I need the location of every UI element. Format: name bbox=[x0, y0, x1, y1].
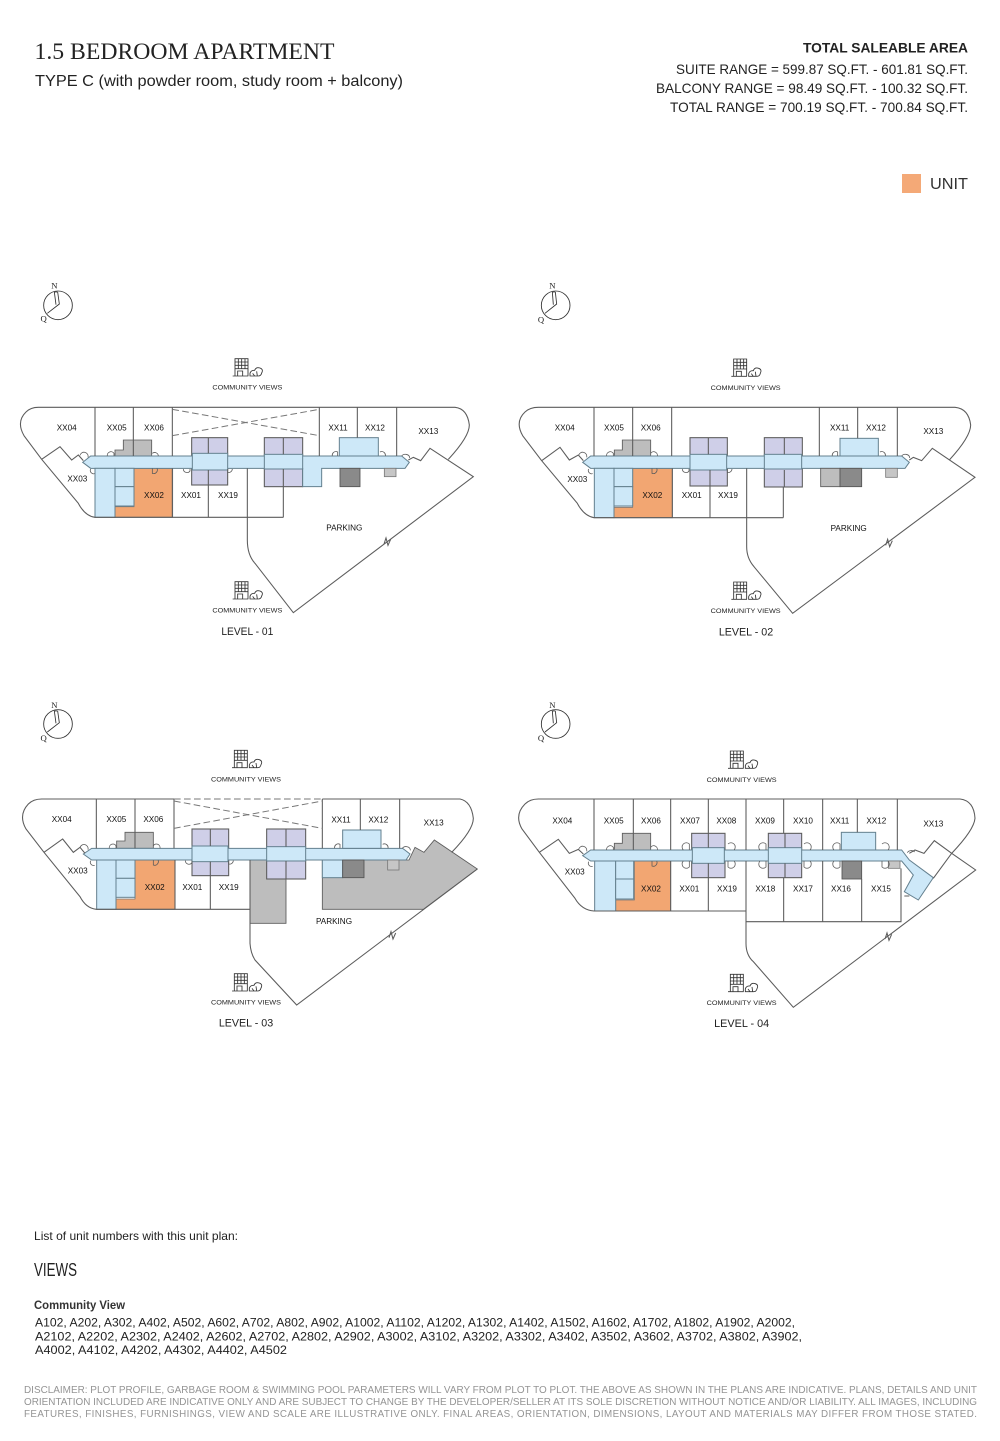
panel: level 01 floor plan bbox=[20, 281, 473, 638]
icon: compass bbox=[538, 281, 570, 324]
icon: community views bottom bbox=[232, 974, 262, 991]
unit labels: XX01 bbox=[682, 491, 702, 500]
parking grey area left bbox=[250, 860, 286, 923]
corridor bbox=[83, 456, 409, 487]
void dashed cross bbox=[172, 409, 319, 436]
unit labels bbox=[555, 424, 944, 533]
doors bbox=[80, 844, 410, 865]
unit labels: XX05 bbox=[106, 815, 127, 824]
unit labels: XX06 bbox=[143, 815, 164, 824]
panel: level 03 floor plan bbox=[23, 700, 477, 1029]
unit labels: XX03 bbox=[68, 867, 88, 876]
unit labels: XX04 bbox=[52, 815, 72, 824]
unit: XX02 highlighted bbox=[115, 468, 173, 517]
icon: community views bottom bbox=[731, 582, 761, 599]
unit labels: XX11 bbox=[331, 815, 351, 824]
label: community views top: COMMUNITY VIEWS bbox=[211, 776, 282, 783]
text: unit list intro: List of unit numbers with this unit plan: bbox=[34, 1230, 238, 1243]
text: suite range: SUITE RANGE = 599.87 SQ.FT. - 601.81 SQ.FT. bbox=[676, 61, 968, 77]
unit labels: XX19 bbox=[718, 491, 738, 500]
text: unit numbers: A2102, A2202, A2302, A2402, A2602, A2702, A2802, A2902, A3002, A3102, A3202, A3302, A3402, A3502, A3602, A3702, A3802, A3902, bbox=[35, 1330, 802, 1344]
unit labels: XX18 bbox=[755, 884, 776, 893]
lift lobby lavender 2 bbox=[764, 438, 802, 487]
service rooms bbox=[340, 468, 396, 487]
icon: compass bbox=[538, 700, 570, 743]
legend: unit: UNIT bbox=[930, 176, 968, 193]
unit: XX02 highlighted bbox=[614, 468, 672, 518]
blue rooms bbox=[595, 832, 876, 911]
walls bbox=[519, 799, 976, 1007]
heading: total saleable area: TOTAL SALEABLE AREA bbox=[803, 40, 968, 56]
heading: views: VIEWS bbox=[34, 1259, 77, 1280]
lift lobby lavender 1 bbox=[192, 829, 229, 876]
service rooms bbox=[343, 860, 399, 878]
unit labels: XX12 bbox=[866, 424, 886, 433]
corridor bbox=[583, 456, 909, 468]
icon: compass bbox=[41, 700, 72, 743]
unit labels: XX11 bbox=[830, 816, 850, 825]
blue rooms bbox=[594, 438, 878, 518]
label: community views top: COMMUNITY VIEWS bbox=[707, 777, 777, 784]
unit labels: XX01 bbox=[181, 491, 201, 500]
unit labels: XX04 bbox=[552, 816, 573, 825]
label: community views bottom: COMMUNITY VIEWS bbox=[212, 608, 283, 615]
core: service grey bbox=[614, 440, 651, 456]
text: unit numbers bbox=[35, 1316, 802, 1357]
blue rooms bbox=[95, 438, 378, 517]
unit labels: XX02 bbox=[144, 491, 164, 500]
unit labels bbox=[552, 816, 944, 893]
unit labels: XX05 bbox=[604, 424, 624, 433]
icon: compass: Q bbox=[41, 733, 48, 743]
legend: unit bbox=[902, 174, 968, 193]
disclaimer: DISCLAIMER: PLOT PROFILE, GARBAGE ROOM & SWIMMING POOL PARAMETERS WILL VARY FROM PLOT TO PLOT. THE ABOVE AS SHOWN IN THE PLANS ARE INDICATIVE. PLANS, DETAILS AND UNIT bbox=[24, 1385, 977, 1396]
unit labels: XX05 bbox=[107, 423, 127, 432]
unit labels: XX03 bbox=[567, 475, 588, 484]
unit labels: XX04 bbox=[57, 423, 77, 432]
label: community views bottom: COMMUNITY VIEWS bbox=[707, 1000, 777, 1007]
label: community views top: COMMUNITY VIEWS bbox=[711, 385, 781, 392]
level label: LEVEL - 04 bbox=[714, 1018, 769, 1030]
doors bbox=[80, 452, 410, 474]
unit labels: PARKING bbox=[316, 917, 352, 926]
lift lobby lavender 1 bbox=[690, 438, 727, 486]
unit labels: XX10 bbox=[793, 816, 813, 825]
icon: compass bbox=[41, 281, 72, 324]
core: service grey bbox=[115, 440, 152, 456]
subtitle: unit type: TYPE C (with powder room, study room + balcony) bbox=[35, 73, 403, 90]
unit: XX02 highlighted bbox=[616, 861, 671, 911]
icon: compass: N bbox=[51, 700, 58, 710]
lift lobby lavender 2 bbox=[267, 829, 306, 879]
label: community views bottom: COMMUNITY VIEWS bbox=[711, 608, 781, 615]
panel: level 04 floor plan bbox=[519, 700, 976, 1030]
unit labels: XX08 bbox=[716, 816, 737, 825]
label: community views bottom: COMMUNITY VIEWS bbox=[211, 999, 282, 1006]
unit labels: XX02 bbox=[642, 491, 663, 500]
walls bbox=[20, 407, 473, 613]
panel: level 02 floor plan bbox=[519, 281, 975, 638]
unit labels: XX19 bbox=[218, 491, 238, 500]
walls bbox=[519, 407, 975, 613]
core: service grey bbox=[614, 833, 651, 850]
core: service grey bbox=[117, 832, 153, 848]
void dashed cross bbox=[174, 799, 322, 828]
unit labels: XX11 bbox=[830, 424, 850, 433]
unit labels: XX04 bbox=[555, 424, 575, 433]
icon: community views top bbox=[728, 751, 758, 768]
unit labels: XX06 bbox=[641, 424, 661, 433]
icon: compass: Q bbox=[41, 314, 48, 324]
subheading: community view: Community View bbox=[34, 1299, 126, 1312]
unit labels bbox=[52, 815, 444, 926]
icon: community views top bbox=[731, 359, 761, 376]
icon: community views bottom bbox=[233, 582, 262, 599]
icon: compass: Q bbox=[538, 314, 545, 324]
doors bbox=[579, 843, 915, 868]
unit labels bbox=[57, 423, 439, 533]
icon: community views top bbox=[232, 750, 262, 768]
disclaimer bbox=[24, 1385, 977, 1420]
corridor bbox=[583, 850, 933, 900]
icon: compass: N bbox=[549, 700, 556, 710]
text: balcony range: BALCONY RANGE = 98.49 SQ.FT. - 100.32 SQ.FT. bbox=[656, 80, 968, 96]
disclaimer: ORIENTATION INCLUDED ARE INDICATIVE ONLY AND ARE SUBJECT TO CHANGE BY THE DEVELOPER/SELLER AT ITS SOLE DISCRETION WITHOUT NOTICE AND/OR LIABILITY. ALL IMAGES, INCLUDING bbox=[24, 1397, 977, 1408]
unit labels: XX19 bbox=[219, 883, 239, 892]
icon: community views bottom bbox=[728, 974, 758, 992]
unit labels: XX06 bbox=[144, 423, 164, 432]
unit labels: XX16 bbox=[831, 884, 851, 893]
text: unit numbers: A102, A202, A302, A402, A502, A602, A702, A802, A902, A1002, A1102, A1202, A1302, A1402, A1502, A1602, A1702, A1802, A1902, A2002, bbox=[35, 1316, 795, 1330]
unit labels: XX09 bbox=[755, 816, 775, 825]
icon: compass: N bbox=[51, 281, 58, 291]
unit labels: XX02 bbox=[641, 884, 661, 893]
level label: LEVEL - 02 bbox=[719, 626, 773, 638]
text: unit numbers: A4002, A4102, A4202, A4302, A4402, A4502 bbox=[35, 1344, 287, 1357]
level label: LEVEL - 03 bbox=[219, 1017, 273, 1029]
text: total range: TOTAL RANGE = 700.19 SQ.FT. - 700.84 SQ.FT. bbox=[670, 99, 968, 115]
label: community views top: COMMUNITY VIEWS bbox=[212, 385, 283, 392]
walls bbox=[23, 799, 477, 1005]
disclaimer: FEATURES, FINISHES, FURNISHINGS, VIEW AND SCALE ARE ILLUSTRATIVE ONLY. FINAL AREAS, ORIENTATION, DIMENSIONS, LAYOUT AND MATERIALS MAY DIFFER FROM THOSE STATED. bbox=[24, 1409, 977, 1420]
unit labels: XX13 bbox=[923, 819, 944, 828]
unit labels: XX03 bbox=[565, 868, 585, 877]
service rooms bbox=[821, 468, 897, 487]
icon: compass: Q bbox=[538, 733, 545, 743]
unit labels: XX01 bbox=[679, 884, 700, 893]
title: 1.5 BEDROOM APARTMENT bbox=[34, 39, 334, 65]
unit labels: XX13 bbox=[418, 427, 439, 436]
level label: LEVEL - 01 bbox=[221, 626, 273, 638]
unit: XX02 highlighted bbox=[116, 860, 175, 909]
lift lobby lavender 2 bbox=[264, 438, 303, 487]
service rooms bbox=[842, 861, 900, 879]
unit labels: XX07 bbox=[680, 816, 700, 825]
unit labels: XX12 bbox=[365, 423, 385, 432]
unit labels: XX12 bbox=[866, 816, 887, 825]
unit labels: XX02 bbox=[145, 883, 165, 892]
icon: compass: N bbox=[549, 281, 556, 291]
lift lobby lavender 1 bbox=[192, 438, 228, 485]
doors bbox=[579, 452, 910, 474]
unit labels: XX17 bbox=[793, 884, 813, 893]
unit labels: PARKING bbox=[831, 524, 867, 533]
icon: community views top bbox=[233, 359, 262, 376]
unit labels: XX19 bbox=[717, 884, 737, 893]
lift lobby lavender 1 bbox=[692, 833, 725, 878]
unit labels: XX11 bbox=[328, 423, 348, 432]
unit labels: XX06 bbox=[641, 816, 661, 825]
unit labels: XX05 bbox=[604, 816, 624, 825]
corridor bbox=[83, 848, 410, 860]
unit labels: XX03 bbox=[67, 475, 88, 484]
unit labels: XX13 bbox=[424, 819, 444, 828]
blue rooms bbox=[97, 830, 381, 909]
parking grey area right bbox=[322, 840, 477, 909]
unit labels: PARKING bbox=[326, 524, 362, 533]
lift lobby lavender 2 bbox=[768, 833, 802, 878]
unit labels: XX15 bbox=[871, 884, 891, 893]
unit labels: XX13 bbox=[923, 427, 944, 436]
unit labels: XX01 bbox=[182, 883, 203, 892]
unit labels: XX12 bbox=[368, 815, 389, 824]
